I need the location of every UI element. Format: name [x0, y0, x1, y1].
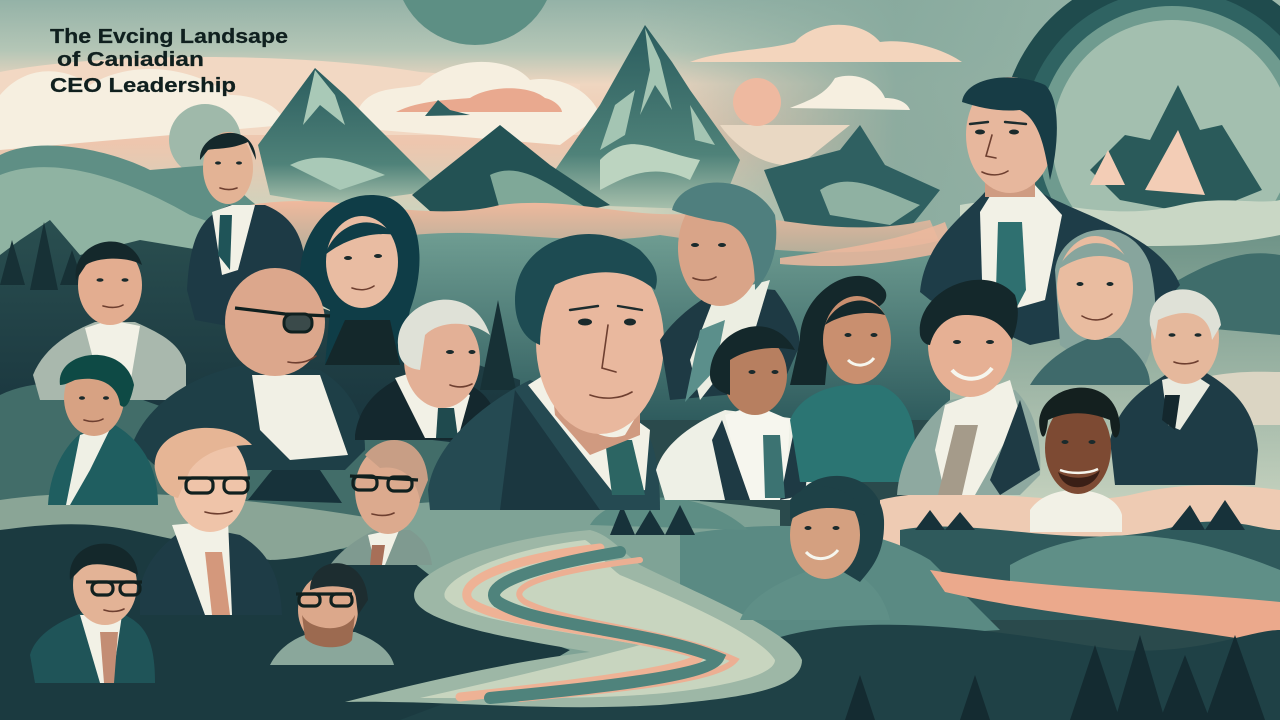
portrait: man standing left — [187, 132, 305, 330]
lower pines right — [845, 635, 1265, 720]
mid ground meadow behind river — [400, 496, 780, 660]
portrait: smiling man tie — [897, 280, 1040, 495]
portrait: white-haired man — [355, 300, 500, 440]
portrait: bearded man glasses — [270, 563, 394, 665]
mid ground right bands — [680, 485, 1280, 658]
portrait: woman teal jacket — [48, 355, 158, 505]
mountains — [258, 25, 940, 240]
sun disc top — [395, 0, 555, 45]
sky background — [0, 0, 1280, 420]
foreground dark ground right — [400, 625, 1280, 720]
portrait: older man far right — [1110, 289, 1258, 485]
river — [345, 530, 802, 707]
portrait: woman dark hair — [300, 195, 420, 365]
layered hills — [0, 146, 1280, 500]
dark forest left — [0, 220, 520, 470]
portrait: smiling man white shirt — [1030, 388, 1122, 532]
peach clouds — [169, 25, 962, 176]
portrait: central CEO — [428, 234, 664, 510]
title: of Caniadian — [57, 49, 204, 71]
tree lines — [248, 455, 1270, 535]
portrait: bald man with glasses — [132, 268, 365, 470]
portrait: CEO upper right — [920, 77, 1180, 345]
portrait: smiling woman teal dress — [790, 276, 915, 482]
portrait: woman grey-teal hair — [1030, 230, 1155, 385]
hill bands lower left — [0, 493, 410, 560]
title — [50, 26, 288, 97]
portrait: man white jacket — [656, 326, 828, 500]
title: The Evcing Landsape — [50, 26, 288, 48]
clouds — [0, 62, 910, 166]
mid ground left hills — [0, 383, 700, 650]
portrait: lower-left man glasses — [30, 544, 155, 683]
portrait: older man center right — [660, 182, 800, 402]
title: CEO Leadership — [50, 75, 236, 97]
portrait: man tan hair glasses — [330, 440, 432, 565]
portrait: man peach hair glasses — [140, 428, 282, 615]
distant peak in arc — [1090, 85, 1262, 215]
foreground dark ground — [0, 520, 570, 720]
arc rings top right — [1000, 0, 1280, 312]
portrait: curly-haired woman — [740, 476, 890, 620]
portrait: man far left light suit — [33, 241, 186, 400]
